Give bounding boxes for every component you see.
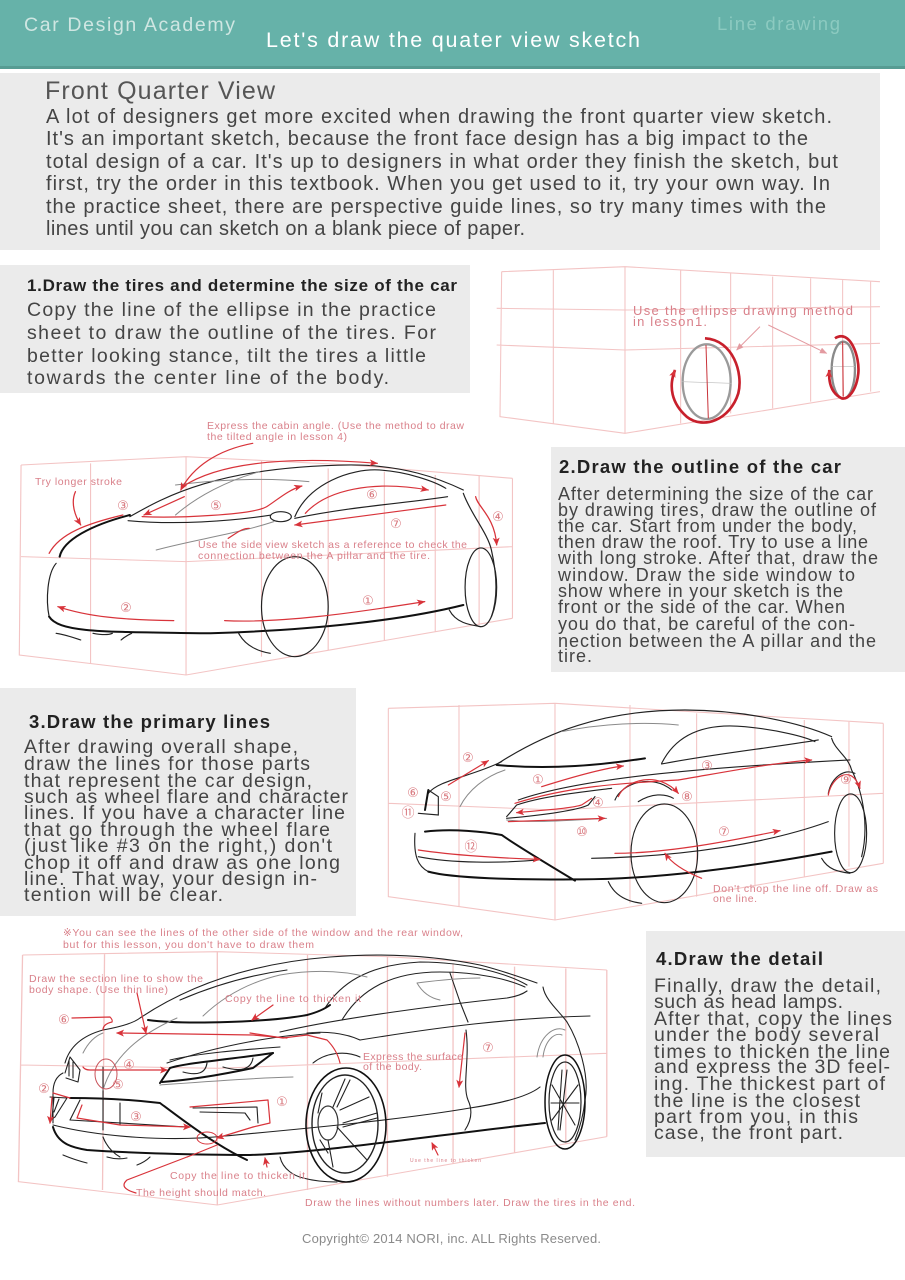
step 3 text: tention will be clear.	[24, 884, 223, 906]
step 3 text: that represent the car design,	[24, 770, 312, 792]
step 2 annotations: ①	[362, 594, 374, 609]
diagram: car outline sketch	[19, 420, 512, 675]
panel: introduction	[0, 73, 880, 250]
step 4 text: times to thicken the line	[654, 1041, 890, 1063]
step 3 text: lines. If you have a character line	[24, 802, 345, 824]
step 2 text: tire.	[558, 646, 592, 666]
step 3 annotations: ⑥	[407, 786, 419, 801]
car body lines	[50, 955, 590, 1182]
step 2 text: nection between the A pillar and the	[558, 631, 876, 651]
step 4 text: the line is the closest	[654, 1090, 861, 1112]
step 2 annotations: ②	[120, 601, 132, 616]
step 2 text: then draw the roof. Try to use a line	[558, 532, 868, 552]
step 4 annotations: Express the surface	[363, 1051, 463, 1063]
ellipse note: Use the ellipse drawing method	[633, 303, 853, 318]
step 4 annotations: ①	[276, 1095, 288, 1110]
step 1 text: sheet to draw the outline of the tires. For	[27, 322, 437, 344]
step 4 text: part from you, in this	[654, 1106, 858, 1128]
step 3 text: that go through the wheel flare	[24, 819, 330, 841]
panel: step 3	[0, 688, 356, 916]
step 2 text: window. Draw the side window to	[557, 565, 855, 585]
step 3 text: line. That way, your design in-	[24, 868, 317, 890]
step 4 annotations: ②	[38, 1082, 50, 1097]
step 4 annotations: ⑤	[112, 1078, 124, 1093]
intro text: total design of a car. It's up to designers in what order they finish the sketch, but	[46, 151, 838, 173]
step 3 text: (just like #3 on the right,) don't	[24, 835, 333, 857]
step 3 annotations: ⑦	[718, 825, 730, 840]
step 3 text: chop it off and draw as one long	[24, 852, 340, 874]
step 1 heading: 1.Draw the tires and determine the size of the car	[27, 276, 457, 295]
intro text	[46, 106, 838, 240]
step 2 annotations: the tilted angle in lesson 4)	[207, 431, 347, 443]
footer copyright: Copyright© 2014 NORI, inc. ALL Rights Reserved.	[302, 1231, 601, 1246]
step 4 text: and express the 3D feel-	[654, 1056, 890, 1078]
step 1 text: Copy the line of the ellipse in the practice	[27, 299, 436, 321]
step 4 annotations: The height should match.	[136, 1187, 266, 1199]
header: academy name: Car Design Academy	[24, 14, 235, 36]
intro text: It's an important sketch, because the front face design has a big impact to the	[46, 128, 808, 150]
header banner	[0, 0, 905, 69]
step 4 text: under the body several	[654, 1024, 879, 1046]
step 3 text: draw the lines for those parts	[24, 753, 310, 775]
panel: step 4	[646, 931, 905, 1157]
step 2 text: show where in your sketch is the	[558, 581, 843, 601]
step 3 annotations: ⑨	[840, 773, 852, 788]
step 4 annotations: Copy the line to thicken it	[225, 993, 361, 1005]
step 1 text: towards the center line of the body.	[27, 367, 389, 389]
step 2 annotations: ③	[117, 499, 129, 514]
ellipse note	[633, 303, 853, 329]
step 4 text: After that, copy the lines	[654, 1008, 892, 1030]
diagram: detail sketch	[18, 927, 635, 1209]
step 2 text: by drawing tires, draw the outline of	[558, 500, 877, 520]
step 3 text	[24, 736, 348, 906]
step 3 annotations: ⑤	[440, 790, 452, 805]
step 2 text: with long stroke. After that, draw the	[557, 548, 878, 568]
intro text: the practice sheet, there are perspective guide lines, so try many times with the	[46, 196, 826, 218]
step 3 text: After drawing overall shape,	[24, 736, 298, 758]
diagram: tire ellipses on perspective grid	[497, 267, 880, 433]
step 4 text: ing. The thickest part of	[654, 1073, 886, 1095]
step 2 annotations: ⑤	[210, 499, 222, 514]
step 2 annotations	[35, 420, 504, 616]
step 4 annotations: ④	[123, 1058, 135, 1073]
step 3 heading: 3.Draw the primary lines	[29, 711, 270, 732]
step 2 annotations: connection between the A pillar and the tire.	[198, 550, 430, 562]
step 4 annotations: ⑥	[58, 1013, 70, 1028]
step 3 annotations	[401, 751, 878, 905]
header: lesson category: Line drawing	[717, 13, 840, 34]
panel: step 1	[0, 265, 470, 393]
step 4 annotations: Draw the lines without numbers later. Draw the tires in the end.	[305, 1197, 635, 1209]
front wheel	[306, 1068, 386, 1182]
step 4 annotations: Use the line to thicken	[410, 1158, 481, 1164]
step 4 annotations: Draw the section line to show the	[29, 973, 203, 985]
step 2 annotations: Use the side view sketch as a reference to check the	[198, 539, 467, 551]
step 2 heading: 2.Draw the outline of the car	[559, 456, 841, 477]
step 3 annotations: ⑪	[401, 806, 415, 821]
step 4 annotations: but for this lesson, you don't have to draw them	[63, 939, 314, 951]
step 2 text: front or the side of the car. When	[558, 597, 845, 617]
step 4 heading: 4.Draw the detail	[656, 948, 823, 969]
red construction lines	[50, 993, 465, 1193]
intro text: lines until you can sketch on a blank piece of paper.	[46, 218, 525, 240]
step 3 annotations: ⑧	[681, 790, 693, 805]
step 3 annotations: ③	[701, 759, 713, 774]
step 4 text: such as head lamps.	[654, 991, 843, 1013]
step 2 text	[557, 484, 878, 666]
rear wheel	[545, 1055, 585, 1149]
step 2 annotations: ④	[492, 510, 504, 525]
step 2 text: you do that, be careful of the con-	[558, 614, 855, 634]
step 4 text: case, the front part.	[654, 1122, 843, 1144]
step 2 text: After determining the size of the car	[558, 484, 873, 504]
ellipse note: in lesson1.	[633, 314, 707, 329]
step 1 text	[27, 299, 437, 389]
step 4 text: Finally, draw the detail,	[654, 975, 881, 997]
intro text: A lot of designers get more excited when drawing the front quarter view sketch.	[46, 106, 832, 128]
step 2 text: the car. Start from under the body,	[558, 516, 857, 536]
header: main title: Let's draw the quater view sketch	[266, 28, 640, 52]
step 4 annotations: ※You can see the lines of the other side of the window and the rear window,	[63, 927, 463, 939]
step 3 text: such as wheel flare and character	[24, 786, 348, 808]
diagram: primary lines sketch	[388, 703, 883, 920]
intro heading: Front Quarter View	[45, 77, 276, 105]
step 3 annotations: one line.	[713, 893, 757, 905]
step 3 annotations: ⑩	[576, 825, 588, 840]
panel: step 2	[551, 447, 905, 672]
step 2 annotations: ⑥	[366, 488, 378, 503]
step 3 annotations: ④	[592, 796, 604, 811]
step 4 annotations: of the body.	[363, 1061, 422, 1073]
step 2 annotations: Try longer stroke	[35, 476, 122, 488]
step 2 annotations: Express the cabin angle. (Use the method to draw	[207, 420, 464, 432]
step 3 annotations: Don't chop the line off. Draw as	[713, 883, 878, 895]
step 4 annotations	[29, 927, 635, 1209]
step 3 annotations: ②	[462, 751, 474, 766]
step 3 annotations: ①	[532, 773, 544, 788]
step 1 text: better looking stance, tilt the tires a little	[27, 345, 426, 367]
step 4 text	[654, 975, 892, 1144]
step 2 annotations: ⑦	[390, 517, 402, 532]
step 4 annotations: body shape. (Use thin line)	[29, 984, 168, 996]
step 4 annotations: Copy the line to thicken it	[170, 1170, 305, 1182]
intro text: first, try the order in this textbook. When you get used to it, try your own way. In	[46, 173, 830, 195]
step 4 annotations: ③	[130, 1110, 142, 1125]
step 3 annotations: ⑫	[464, 840, 478, 855]
step 4 annotations: ⑦	[482, 1041, 494, 1056]
